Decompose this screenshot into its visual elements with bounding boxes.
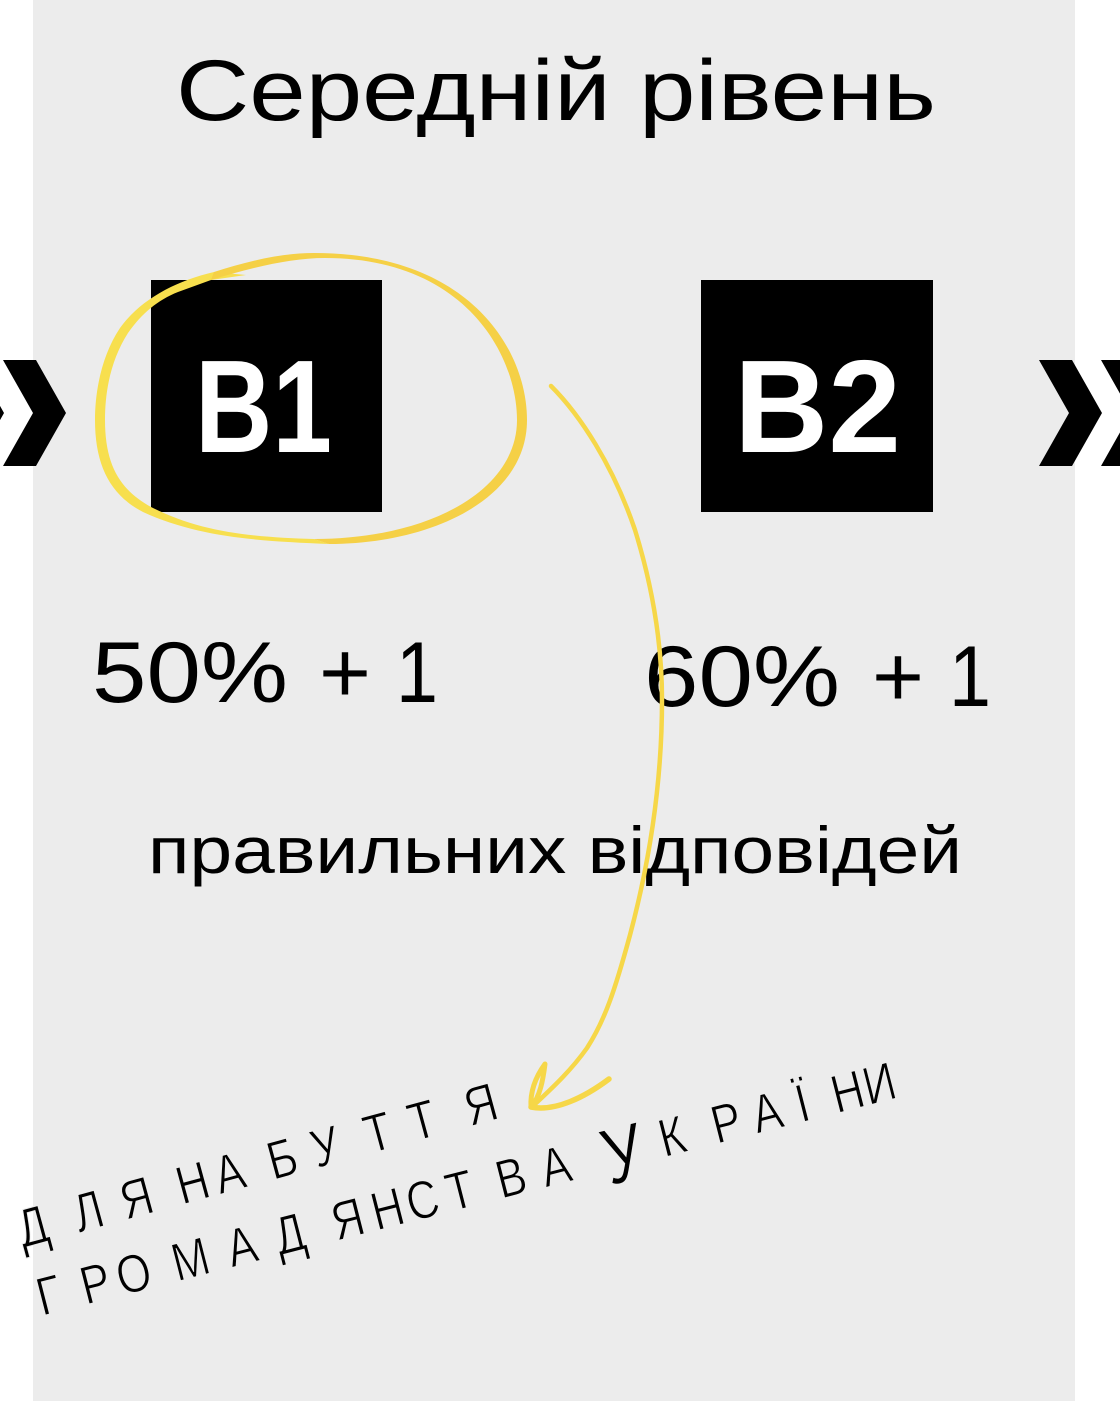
score: B1 threshold: + (319, 625, 371, 721)
score: B2 threshold: + (872, 629, 924, 725)
score: B1 threshold: 50% (92, 625, 288, 721)
level badge: B2 (701, 280, 933, 512)
hand-drawn circle around B1 (95, 253, 527, 544)
score: B1 threshold (92, 625, 438, 721)
score: B2 threshold: 60% (644, 629, 840, 725)
arrow: from circle to note (531, 386, 662, 1108)
icon: right chevrons (1039, 360, 1120, 466)
level badge: B1 (151, 280, 382, 512)
score: B1 threshold: 1 (396, 625, 438, 721)
handwritten note: line 2: ГРОМАДЯНСТВА (30, 1134, 577, 1328)
icon: left chevrons (0, 360, 66, 466)
caption: correct answers: правильних відповідей (148, 813, 962, 887)
level badge: B2: B2 (734, 333, 901, 480)
handwritten note: line 2: КРАЇНИ (652, 1051, 902, 1169)
score: B2 threshold (644, 629, 991, 725)
level badge: B1: B1 (195, 333, 332, 480)
handwritten note: line 1: ДЛЯ НАБУТТЯ (10, 1072, 504, 1260)
title: Середній рівень (176, 43, 936, 139)
score: B2 threshold: 1 (949, 629, 991, 725)
handwritten note: line 2: У (592, 1105, 655, 1203)
